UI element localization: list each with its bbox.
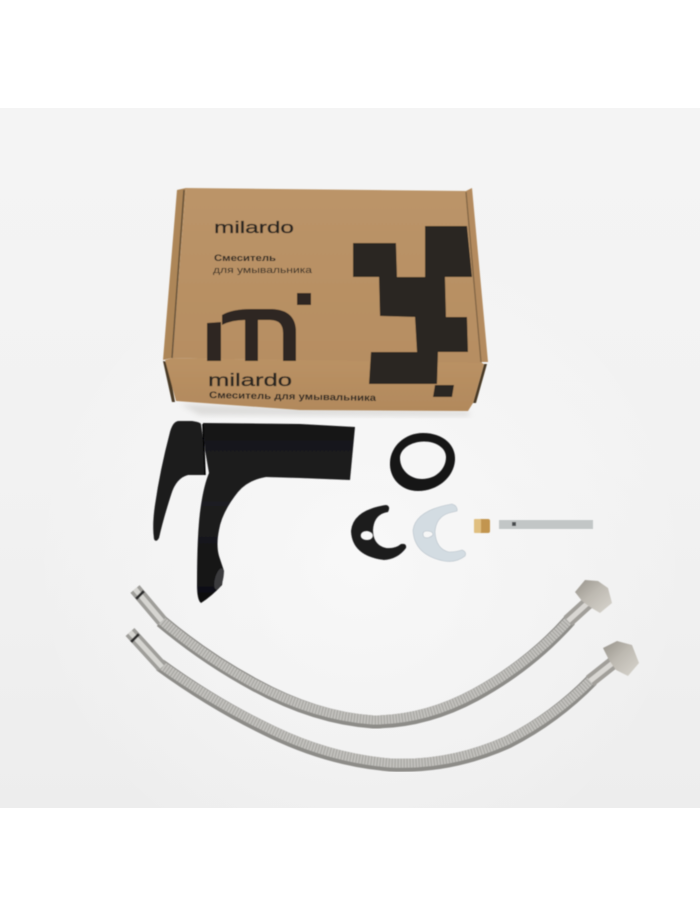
box top face <box>172 188 482 364</box>
upper hose nut <box>575 580 612 613</box>
brand name on front: milardo <box>208 370 292 390</box>
lower hose left fitting <box>130 632 162 667</box>
upper hose right fitting <box>568 601 590 621</box>
brand name on lid: milardo <box>214 218 294 237</box>
small black pixel <box>433 385 454 397</box>
box left flap <box>163 188 186 360</box>
cardboard box <box>163 188 488 411</box>
lower hose o-ring <box>134 637 136 639</box>
silver washer <box>413 504 466 561</box>
lever seam <box>203 424 205 475</box>
large m logo <box>207 293 311 361</box>
upper braided hose <box>135 589 590 722</box>
brass nut <box>474 519 490 533</box>
left dark sliver <box>163 361 175 402</box>
box right flap <box>466 188 488 362</box>
upper hose left fitting <box>135 589 162 621</box>
photo background <box>0 108 700 808</box>
aerator detail <box>212 567 226 591</box>
box shadow <box>180 404 470 416</box>
lower hose nut <box>603 641 639 676</box>
fold shadow left <box>172 190 184 358</box>
lid text line 1: Смеситель <box>214 253 276 264</box>
faucet lever <box>153 421 205 541</box>
right dark sliver <box>473 364 487 403</box>
faucet <box>153 421 355 603</box>
faucet body <box>197 423 355 603</box>
upper hose o-ring <box>139 594 141 596</box>
fold shadow right <box>466 192 481 362</box>
black washer <box>351 505 406 560</box>
background glow <box>0 108 700 808</box>
box front face <box>165 358 484 411</box>
lower hose right fitting <box>590 662 614 681</box>
rubber ring gasket <box>390 433 455 491</box>
front text: Смеситель для умывальника <box>209 390 377 404</box>
lid text line 2: для умывальника <box>213 265 313 276</box>
threaded rod <box>499 520 593 529</box>
black pixel pattern <box>353 226 472 384</box>
lower braided hose <box>130 632 614 765</box>
